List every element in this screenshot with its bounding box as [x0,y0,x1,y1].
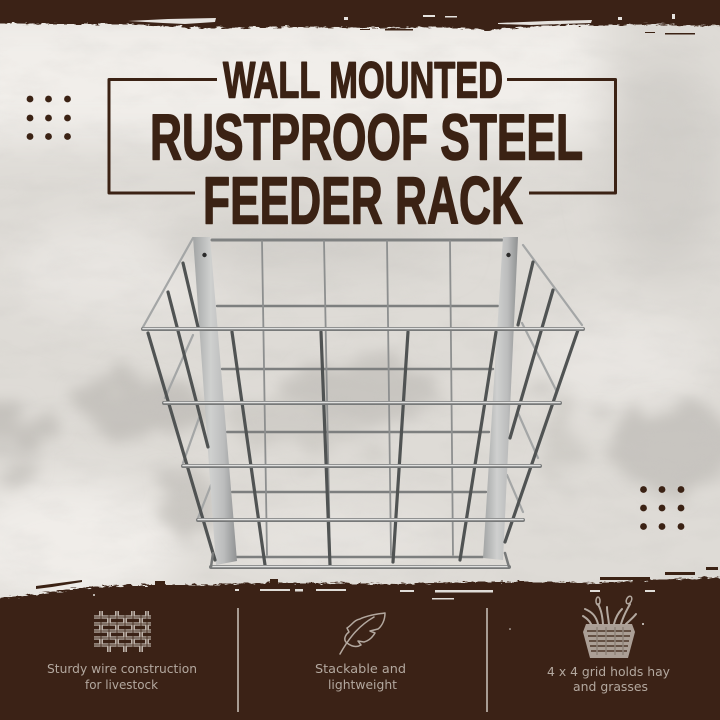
top torn brown band [0,0,720,34]
divider right [486,608,488,712]
icon: woven wire mesh [94,611,151,652]
caption: sturdy wire: Sturdy wire construction [47,662,197,676]
divider left [237,608,239,712]
caption: stackable [315,662,406,692]
front horizontal rails [143,329,583,567]
title: FEEDER RACK [203,164,523,238]
title frame [109,80,616,193]
icon: basket with grasses [583,595,636,658]
caption: sturdy wire: for livestock [85,678,158,692]
title [150,52,583,238]
caption: sturdy wire [47,662,197,692]
feature: sturdy wire construction [47,611,197,692]
dots: top left [27,96,71,140]
mounting posts [193,237,518,565]
caption: grid: and grasses [573,680,648,694]
feature: stackable and lightweight [315,613,406,692]
wire feeder rack [143,237,583,567]
caption: grid: 4 x 4 grid holds hay [547,665,670,679]
front dark wires [148,262,578,565]
dots: bottom right [640,486,684,530]
caption: stackable: lightweight [328,678,397,692]
icon: feather [340,613,385,654]
caption: stackable: Stackable and [315,662,406,676]
back grid wires [212,240,502,557]
caption: grid [547,665,670,694]
title: WALL MOUNTED [223,52,503,108]
bottom torn brown panel [0,567,720,720]
feature: 4 x 4 grid holds hay [547,595,670,694]
side diagonal wires [143,238,582,518]
